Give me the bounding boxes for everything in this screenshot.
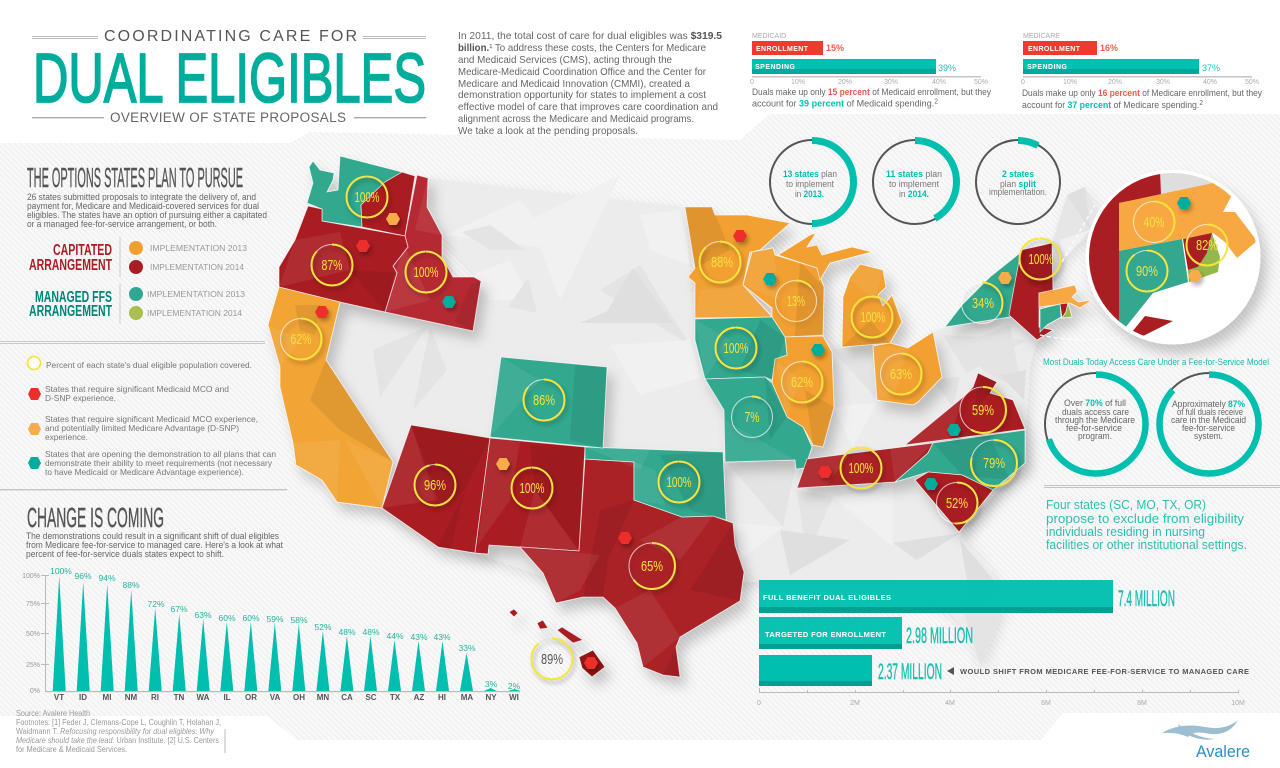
chart: medicare enrollment vs spending: 16% xyxy=(1100,43,1118,53)
legend: orange hexagon: States that require significant Medicaid MCO experience, xyxy=(45,414,258,424)
chart: percent expected to shift: CA xyxy=(341,693,353,702)
state: new york xyxy=(945,253,1022,327)
subtitle: OVERVIEW OF STATE PROPOSALS xyxy=(110,110,346,125)
legend: orange hexagon xyxy=(28,414,258,442)
description: eligibles. The states have an option of pursuing either a capitated xyxy=(27,210,267,220)
title block xyxy=(32,28,426,125)
ring: 11 states 2014: in 2014. xyxy=(899,189,929,199)
chart: percent expected to shift: 44% xyxy=(386,631,404,641)
ring: medicare 70 percent: program. xyxy=(1078,431,1112,441)
chart: percent expected to shift: AZ xyxy=(414,693,424,702)
intro paragraph: In 2011, the total cost of care for dual eligibles was $319.5 xyxy=(458,30,722,42)
ring: 11 states 2014 xyxy=(873,140,957,224)
ring: medicaid 87 percent: fee-for-service xyxy=(1182,423,1235,433)
ring: 13 states 2013: 13 states plan xyxy=(783,169,837,179)
text: THE OPTIONS STATES PLAN TO PURSUE xyxy=(27,162,243,193)
ring: medicare 70 percent: Over 70% of full xyxy=(1064,398,1126,408)
description: 26 states submitted proposals to integrate the delivery of, and xyxy=(27,192,256,202)
gauge labels: 7% xyxy=(744,409,760,426)
callout: four states exclude: Four states (SC, MO, TX, OR) xyxy=(1046,497,1206,512)
state: connecticut xyxy=(1040,304,1061,332)
chart: percent expected to shift: 88% xyxy=(122,580,140,590)
chart: percent expected to shift: 58% xyxy=(290,615,308,625)
legend: orange hexagon: experience. xyxy=(45,432,88,442)
gauge labels: 100% xyxy=(848,460,874,477)
ring: 13 states 2013: to implement xyxy=(786,179,834,189)
axis xyxy=(757,688,1245,707)
state: south carolina xyxy=(915,472,993,532)
description xyxy=(27,192,267,229)
axis: 8M xyxy=(1137,700,1147,707)
chart: percent expected to shift xyxy=(22,566,521,702)
source and footnotes: Footnotes: [1] Feder J, Clemans-Cope L, Coughlin T, Holahan J, xyxy=(16,717,221,727)
chart: percent expected to shift: 33% xyxy=(458,643,476,653)
ring: 11 states 2014: to implement xyxy=(889,179,939,189)
bar chart: enrollment millions: 2.98 MILLION xyxy=(906,623,973,648)
managed ffs arrangement legend: IMPLEMENTATION 2014 xyxy=(147,309,243,318)
managed ffs arrangement legend xyxy=(29,284,246,324)
capitated arrangement legend: CAPITATED xyxy=(53,242,112,259)
gauge labels: 63% xyxy=(890,366,912,383)
ring: medicaid 87 percent: of full duals receive xyxy=(1177,407,1243,417)
ring: medicaid 87 percent: Approximately 87% xyxy=(1172,399,1245,409)
legend: percent covered: Percent of each state's dual eligible population covered. xyxy=(46,360,252,370)
chart: percent expected to shift: IL xyxy=(223,693,231,702)
chart: percent expected to shift: 48% xyxy=(362,627,380,637)
gauge labels: 96% xyxy=(424,477,446,494)
inset hexagons xyxy=(1177,197,1202,282)
intro paragraph: We take a look at the pending proposals. xyxy=(458,125,638,137)
chart: medicaid enrollment vs spending: account for 39 percent of Medicaid spending. xyxy=(752,98,937,108)
state: north carolina xyxy=(895,430,1025,490)
description: or a managed fee-for-service arrangement, or both. xyxy=(27,219,217,229)
panel: change is coming: CHANGE IS COMING xyxy=(27,502,164,533)
chart: percent expected to shift: 0% xyxy=(30,688,40,695)
chart: medicare enrollment vs spending: 30% xyxy=(1156,79,1170,86)
intro paragraph: effective model of care that improves care coordination and xyxy=(458,101,718,113)
ring: 2 states split: plan split xyxy=(1000,179,1036,189)
ring: 2 states split: implementation. xyxy=(989,187,1047,197)
chart: percent expected to shift: ID xyxy=(79,693,87,702)
bar: spending: SPENDING xyxy=(1027,64,1068,71)
legend: red hexagon xyxy=(28,384,229,403)
state: hawaii xyxy=(509,609,605,677)
capitated arrangement legend: ARRANGEMENT xyxy=(29,257,112,274)
chart: percent expected to shift: 72% xyxy=(147,599,165,609)
bar: spending xyxy=(1023,59,1199,74)
capitated arrangement legend: IMPLEMENTATION 2013 xyxy=(150,244,248,253)
managed ffs arrangement legend: MANAGED FFS xyxy=(35,289,112,306)
gauge labels: 86% xyxy=(533,392,555,409)
chart: medicaid enrollment vs spending: MEDICAID xyxy=(752,33,786,40)
chart: percent expected to shift: 100% xyxy=(22,573,40,580)
inset gauges: 90% xyxy=(1136,263,1158,280)
chart: percent expected to shift: RI xyxy=(151,693,159,702)
state: iowa xyxy=(695,317,787,380)
chart: percent expected to shift: 52% xyxy=(314,622,332,632)
intro paragraph xyxy=(458,30,722,137)
chart: percent expected to shift: VA xyxy=(270,693,280,702)
chart: percent expected to shift: TN xyxy=(174,693,185,702)
description: from Medicare fee-for-service to managed care. Here's a look at what xyxy=(26,540,283,550)
gauge labels: 62% xyxy=(290,331,312,348)
chart: percent expected to shift: 48% xyxy=(338,627,356,637)
axis: 6M xyxy=(1041,700,1051,707)
chart: medicaid enrollment vs spending: 39% xyxy=(938,63,956,73)
ring: medicaid 87 percent: system. xyxy=(1194,431,1223,441)
inset gauges xyxy=(1126,202,1228,292)
chart: medicaid enrollment vs spending xyxy=(750,33,991,108)
gauge labels: 79% xyxy=(983,455,1005,472)
intro paragraph: and Medicaid Services (CMS), acting through the xyxy=(458,54,672,66)
legend: orange hexagon: and potentially limited Medicare Advantage (D-SNP) xyxy=(45,423,239,433)
source and footnotes: Source: Avalere Health xyxy=(16,708,90,718)
intro paragraph: Medicare-Medicaid Coordination Office and the Center for xyxy=(458,66,706,78)
state: michigan upper xyxy=(778,233,872,280)
chart: medicaid enrollment vs spending: 15% xyxy=(826,43,844,53)
axis: 2M xyxy=(850,700,860,707)
callout: four states exclude: facilities or other institutional settings. xyxy=(1046,537,1247,552)
gauge labels: 100% xyxy=(666,474,692,491)
gauge labels: 100% xyxy=(520,480,544,497)
gauge labels: 89% xyxy=(541,651,563,668)
bar: would shift: 2.37 MILLION xyxy=(878,659,942,684)
chart: percent expected to shift: 96% xyxy=(74,571,92,581)
state: ohio xyxy=(873,332,942,405)
chart: percent expected to shift: 3% xyxy=(485,679,498,689)
state: new mexico xyxy=(475,438,585,554)
chart: medicare enrollment vs spending: 50% xyxy=(1245,79,1259,86)
chart: medicare enrollment vs spending xyxy=(1021,33,1262,110)
chart: percent expected to shift: OH xyxy=(293,693,305,702)
chart: percent expected to shift: 94% xyxy=(98,573,116,583)
legend: percent covered xyxy=(28,356,252,370)
bar: enrollment: ENROLLMENT xyxy=(756,46,809,53)
description: The demonstrations could result in a significant shift of dual eligibles xyxy=(26,531,279,541)
source and footnotes: for Medicare & Medicaid Services. xyxy=(16,744,127,754)
ring: medicare 70 percent: through the Medicare xyxy=(1055,415,1135,425)
state: illinois xyxy=(772,336,834,447)
non-participating states in grey low-poly xyxy=(326,178,1100,668)
gauge labels: 13% xyxy=(787,293,805,310)
source and footnotes: Waidmann T. Refocusing responsibility for dual eligibles: Why xyxy=(16,726,215,736)
chart: percent expected to shift: NY xyxy=(485,693,497,702)
chart: medicare enrollment vs spending: 2 xyxy=(1199,100,1203,107)
caption: Duals make up only 15 percent of Medicaid enrollment, but they xyxy=(752,87,991,97)
gauge labels: 59% xyxy=(972,402,994,419)
gauges: percent of dual eligibles covered xyxy=(280,176,1060,680)
logo: avalere xyxy=(1162,720,1250,761)
state: missouri xyxy=(705,377,812,469)
state: vermont and new hampshire xyxy=(1009,243,1053,340)
hexagon markers xyxy=(315,213,1012,669)
chart: medicaid enrollment vs spending: 40% xyxy=(932,79,946,86)
bar: enrollment xyxy=(1023,41,1097,55)
axis: 0 xyxy=(757,700,761,707)
chart: percent expected to shift: SC xyxy=(365,693,377,702)
chart: percent expected to shift: 67% xyxy=(170,604,188,614)
chart: medicare enrollment vs spending: 40% xyxy=(1203,79,1217,86)
state: idaho xyxy=(385,175,481,331)
gauge labels: 100% xyxy=(860,309,886,326)
state: oklahoma xyxy=(585,447,726,520)
bar: enrollment xyxy=(752,41,823,55)
intro paragraph: demonstration opportunity for states to implement a cost xyxy=(458,89,706,101)
bar: would shift: WOULD SHIFT FROM MEDICARE FEE-FOR-SERVICE TO MANAGED CARE xyxy=(960,667,1249,676)
legend: teal hexagon: demonstrate their ability to meet requirements (not necessary xyxy=(45,458,273,468)
ring: medicaid 87 percent xyxy=(1158,373,1260,475)
bar: targeted for enrollment xyxy=(759,617,973,649)
chart: percent expected to shift: 25% xyxy=(26,662,40,669)
chart: medicare enrollment vs spending: account for 37 percent of Medicare spending. xyxy=(1022,100,1205,110)
arrow xyxy=(947,667,954,675)
managed ffs arrangement legend: ARRANGEMENT xyxy=(29,303,112,320)
chart: percent expected to shift: WA xyxy=(197,693,210,702)
ring: 2 states split: 2 states xyxy=(1002,169,1034,179)
legend: teal hexagon xyxy=(28,449,276,477)
state: oregon xyxy=(279,206,408,312)
ring: 13 states 2013: in 2013. xyxy=(795,189,824,199)
bar: spending: SPENDING xyxy=(755,64,796,71)
chart: medicaid enrollment vs spending: 2 xyxy=(934,98,938,106)
chart: percent expected to shift: WI xyxy=(509,693,519,702)
description xyxy=(26,531,283,559)
inset: new england magnified xyxy=(1040,165,1260,344)
low-poly facets on states xyxy=(268,178,1053,677)
state: rhode island xyxy=(1060,303,1072,318)
callout: four states exclude: individuals residing in nursing xyxy=(1046,524,1205,539)
ring: medicare 70 percent: fee-for-service xyxy=(1066,423,1122,433)
axis: 4M xyxy=(945,700,955,707)
ring: medicare 70 percent: duals access care xyxy=(1062,407,1129,417)
state: tennessee xyxy=(797,443,933,488)
panel: fee-for-service model xyxy=(1043,357,1269,475)
state: colorado xyxy=(490,357,607,448)
ring: medicaid 87 percent: care in the Medicaid xyxy=(1171,415,1246,425)
description: payment for, Medicare and Medicaid-covered services for dual xyxy=(27,201,259,211)
chart: medicaid enrollment vs spending: 30% xyxy=(884,79,898,86)
bar chart: enrollment millions: 7.4 MILLION xyxy=(1118,586,1175,611)
description: percent of fee-for-service duals states expect to shift. xyxy=(26,549,224,559)
state: texas xyxy=(520,459,744,677)
intro paragraph: billion.¹ To address these costs, the Centers for Medicare xyxy=(458,42,706,54)
state: virginia xyxy=(905,373,1025,445)
source and footnotes: Medicare should take the lead. Urban Institute. [2] U.S. Centers xyxy=(16,735,219,745)
legend: red hexagon: D-SNP experience. xyxy=(45,393,116,403)
panel: options states plan to pursue xyxy=(27,162,267,324)
ring: 2 states split xyxy=(976,140,1060,224)
gauge labels: 100% xyxy=(1028,251,1054,268)
implementation rings xyxy=(770,140,1060,224)
callout: four states exclude: propose to exclude from eligibility xyxy=(1046,511,1245,526)
chart: percent expected to shift: 50% xyxy=(26,631,40,638)
gauge labels: 100% xyxy=(354,189,380,206)
state: washington xyxy=(307,156,415,236)
caption: Duals make up only 16 percent of Medicare enrollment, but they xyxy=(1022,88,1262,98)
gauge labels: 87% xyxy=(322,257,342,274)
legend: map symbols xyxy=(28,356,276,477)
chart: percent expected to shift: 43% xyxy=(433,632,451,642)
ring: 11 states 2014: 11 states plan xyxy=(886,169,942,179)
legend: teal hexagon: to have Medicaid or Medicare Advantage experience). xyxy=(45,467,244,477)
ring: medicare 70 percent xyxy=(1045,373,1147,475)
chart: medicaid enrollment vs spending: 20% xyxy=(838,79,852,86)
bar: would shift xyxy=(759,655,1249,686)
capitated arrangement legend xyxy=(29,237,248,277)
chart: medicaid enrollment vs spending: 0 xyxy=(750,79,754,86)
bar: targeted for enrollment: TARGETED FOR ENROLLMENT xyxy=(765,630,886,639)
gauge labels: 34% xyxy=(972,295,994,312)
bar: spending xyxy=(752,59,936,74)
chart: percent expected to shift: MA xyxy=(461,693,473,702)
state: massachusetts xyxy=(1039,285,1092,308)
inset gauges: 40% xyxy=(1144,214,1164,231)
chart: percent expected to shift: 60% xyxy=(218,613,236,623)
chart: medicare enrollment vs spending: MEDICARE xyxy=(1023,33,1060,40)
title: dual eligibles: DUAL ELIGIBLES xyxy=(33,39,426,117)
chart: percent expected to shift: 60% xyxy=(242,613,260,623)
callout: four states exclude xyxy=(1046,497,1247,552)
intro paragraph: Medicare and Medicaid Innovation (CMMI), created a xyxy=(458,78,690,90)
title line: coordinating care for: COORDINATING CARE FOR xyxy=(104,28,357,45)
chart: percent expected to shift: 43% xyxy=(410,632,428,642)
chart: percent expected to shift: 100% xyxy=(50,566,72,576)
state: california xyxy=(268,287,393,508)
chart: medicare enrollment vs spending: 20% xyxy=(1108,79,1122,86)
state: wisconsin xyxy=(743,248,824,337)
inset gauges: 82% xyxy=(1196,237,1218,254)
state: minnesota xyxy=(685,207,790,318)
participating states xyxy=(268,156,1092,677)
chart: medicare enrollment vs spending: 10% xyxy=(1063,79,1077,86)
chart: percent expected to shift: OR xyxy=(245,693,257,702)
chart: percent expected to shift: HI xyxy=(438,693,446,702)
panel: change is coming xyxy=(22,502,521,702)
ring: 13 states 2013 xyxy=(770,140,854,224)
logo: avalere: Avalere xyxy=(1196,742,1250,761)
bar: enrollment: ENROLLMENT xyxy=(1028,46,1081,53)
bar: full benefit dual eligibles xyxy=(759,580,1175,613)
gauge labels: 52% xyxy=(946,495,968,512)
chart: percent expected to shift: MN xyxy=(317,693,329,702)
capitated arrangement legend: IMPLEMENTATION 2014 xyxy=(150,263,245,272)
chart: percent expected to shift: 59% xyxy=(266,614,284,624)
chart: percent expected to shift: VT xyxy=(54,693,64,702)
chart: medicaid enrollment vs spending: 50% xyxy=(974,79,988,86)
gauge labels: 88% xyxy=(711,254,733,271)
chart: percent expected to shift: 75% xyxy=(26,601,40,608)
legend: red hexagon: States that require significant Medicaid MCO and xyxy=(45,384,229,394)
bar chart: enrollment millions xyxy=(757,580,1249,707)
map of united states xyxy=(268,156,1100,680)
chart: percent expected to shift: TX xyxy=(390,693,401,702)
gauge labels xyxy=(290,189,1054,668)
gauge labels: 100% xyxy=(414,264,438,281)
chart: medicaid enrollment vs spending: 10% xyxy=(791,79,805,86)
state: arizona xyxy=(382,425,490,553)
chart: percent expected to shift: 63% xyxy=(194,610,212,620)
chart: medicare enrollment vs spending: 37% xyxy=(1202,63,1220,73)
legend: teal hexagon: States that are opening the demonstration to all plans that can xyxy=(45,449,276,459)
managed ffs arrangement legend: IMPLEMENTATION 2013 xyxy=(147,290,246,299)
gauge labels: 100% xyxy=(724,340,748,357)
source and footnotes xyxy=(16,708,226,754)
gauge labels: 65% xyxy=(641,558,663,575)
axis: 10M xyxy=(1231,700,1245,707)
chart: percent expected to shift: 2% xyxy=(508,681,521,691)
chart: percent expected to shift: MI xyxy=(103,693,111,702)
bar: full benefit dual eligibles: FULL BENEFIT DUAL ELIGIBLES xyxy=(763,593,891,602)
intro paragraph: alignment across the Medicare and Medicaid programs. xyxy=(458,113,694,125)
gauge labels: 62% xyxy=(791,374,813,391)
state: michigan lower xyxy=(842,264,902,347)
chart: percent expected to shift: NM xyxy=(125,693,138,702)
chart: medicare enrollment vs spending: 0 xyxy=(1021,79,1025,86)
